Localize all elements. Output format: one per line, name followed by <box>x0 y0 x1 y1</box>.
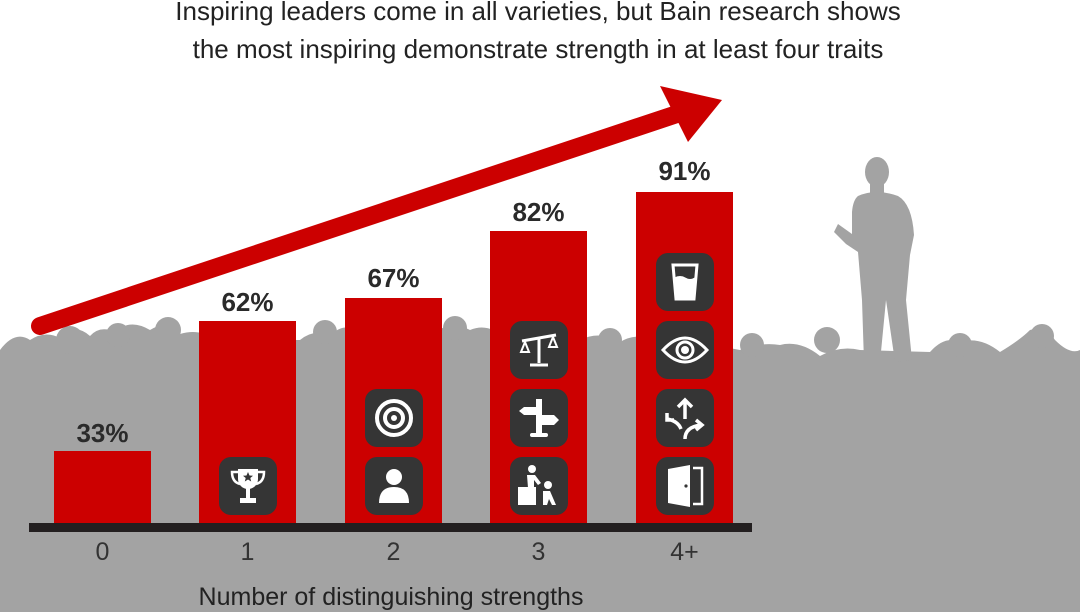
text: 3 <box>532 538 545 566</box>
icon: glass <box>656 253 714 311</box>
title: the most inspiring demonstrate strength in at least four traits <box>193 34 883 64</box>
x-axis title: Number of distinguishing strengths <box>199 583 583 611</box>
speaker <box>865 157 889 187</box>
baseline axis <box>29 523 752 532</box>
icon: eye <box>656 321 714 379</box>
text: 1 <box>241 538 254 566</box>
label 82%: 82% <box>512 197 565 227</box>
title <box>175 0 901 64</box>
text: 2 <box>387 538 400 566</box>
label 91%: 91% <box>658 156 711 186</box>
bar 3 with scale, signpost, helping icons <box>490 231 587 523</box>
bar 4+ with glass, eye, arrows, door icons <box>636 192 733 523</box>
bar 0 <box>54 451 151 523</box>
x-axis labels <box>96 538 699 566</box>
icon: target <box>365 389 423 447</box>
icon: helping hand <box>510 457 568 515</box>
text: 0 <box>96 538 109 566</box>
label 33%: 33% <box>76 418 129 448</box>
icon: person <box>365 457 423 515</box>
label 62%: 62% <box>221 287 274 317</box>
icon: signpost <box>510 389 568 447</box>
icon: trophy <box>219 457 277 515</box>
icon: scales <box>510 321 568 379</box>
trend arrow <box>31 86 722 335</box>
text: 4+ <box>670 538 699 566</box>
bar 1 with trophy icon <box>199 321 296 523</box>
label 67%: 67% <box>367 263 420 293</box>
icon: branching arrows <box>656 389 714 447</box>
icon: door <box>656 457 714 515</box>
bar 2 with target and person icons <box>345 298 442 523</box>
